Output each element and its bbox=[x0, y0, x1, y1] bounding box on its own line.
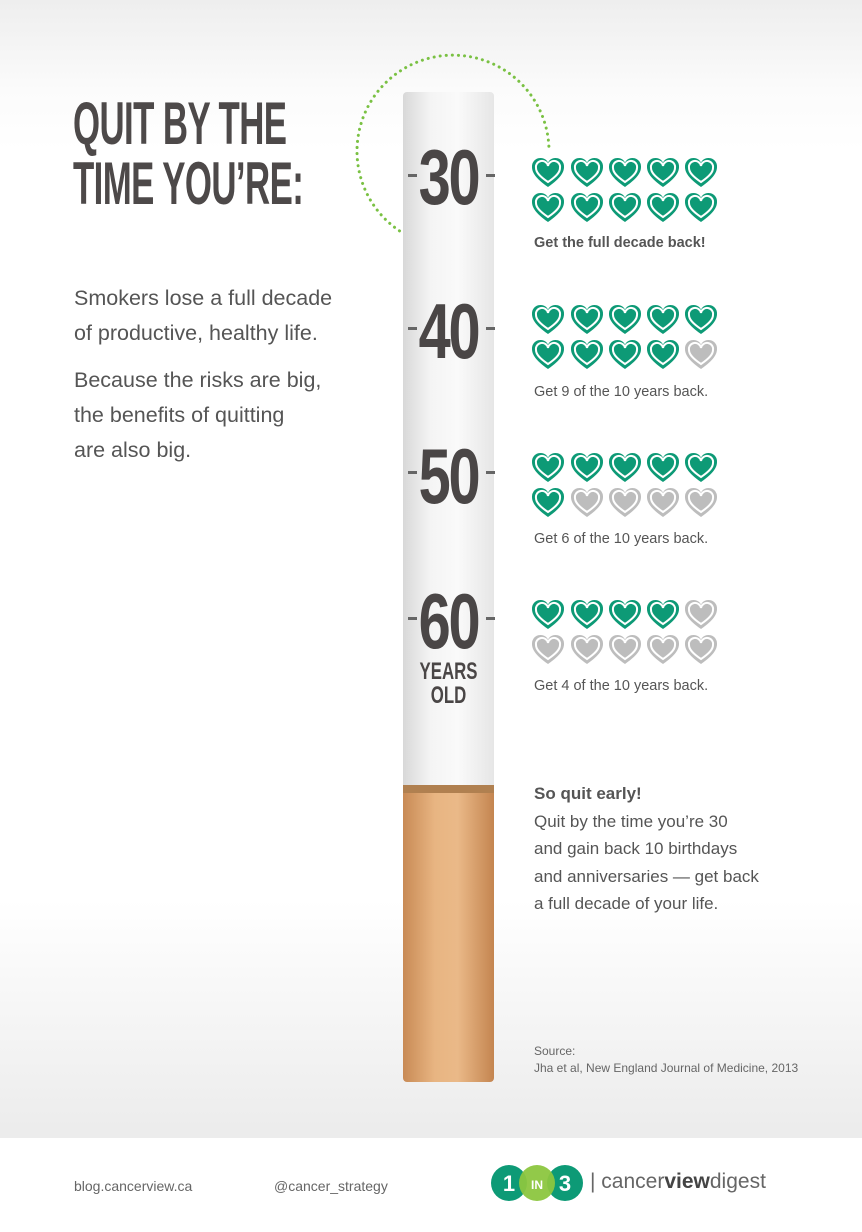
intro text: Smokers lose a full decade bbox=[74, 286, 332, 310]
source: Source: bbox=[534, 1044, 575, 1058]
intro text: of productive, healthy life. bbox=[74, 321, 318, 345]
dotted arc bbox=[356, 54, 550, 232]
text: Get 9 of the 10 years back. bbox=[534, 384, 708, 400]
intro text: the benefits of quitting bbox=[74, 403, 284, 427]
source bbox=[534, 1044, 798, 1075]
footer links: blog.cancerview.ca bbox=[74, 1178, 192, 1194]
conclusion: So quit early! bbox=[534, 784, 642, 803]
text: OLD bbox=[431, 682, 466, 709]
logo: IN bbox=[531, 1178, 543, 1192]
title: TIME YOU’RE: bbox=[73, 150, 303, 217]
intro text bbox=[74, 286, 332, 462]
logo: | cancerviewdigest bbox=[590, 1170, 766, 1193]
conclusion: and gain back 10 birthdays bbox=[534, 839, 737, 858]
logo bbox=[491, 1165, 766, 1201]
hearts bbox=[532, 158, 717, 664]
conclusion: Quit by the time you’re 30 bbox=[534, 812, 728, 830]
conclusion: a full decade of your life. bbox=[534, 894, 718, 913]
captions: Get the full decade back! bbox=[534, 235, 706, 251]
text: 50 bbox=[419, 432, 478, 520]
text: YEARS bbox=[420, 658, 477, 685]
logo: 1 bbox=[503, 1171, 515, 1196]
conclusion bbox=[534, 784, 759, 913]
cigarette bbox=[403, 92, 494, 1082]
text: @cancer_strategy bbox=[274, 1178, 388, 1194]
text: 60 bbox=[419, 577, 478, 665]
source: Jha et al, New England Journal of Medicine, 2013 bbox=[534, 1061, 798, 1075]
intro text: Because the risks are big, bbox=[74, 368, 321, 392]
text: Get 4 of the 10 years back. bbox=[534, 678, 708, 694]
title: QUIT BY THE bbox=[73, 90, 286, 157]
text: Get 6 of the 10 years back. bbox=[534, 531, 708, 547]
text: 40 bbox=[419, 287, 478, 375]
age labels: 30 bbox=[419, 133, 478, 221]
footer band bbox=[0, 1138, 862, 1232]
intro text: are also big. bbox=[74, 438, 191, 462]
title bbox=[73, 90, 303, 217]
logo: 3 bbox=[559, 1171, 571, 1196]
conclusion: and anniversaries — get back bbox=[534, 866, 759, 886]
